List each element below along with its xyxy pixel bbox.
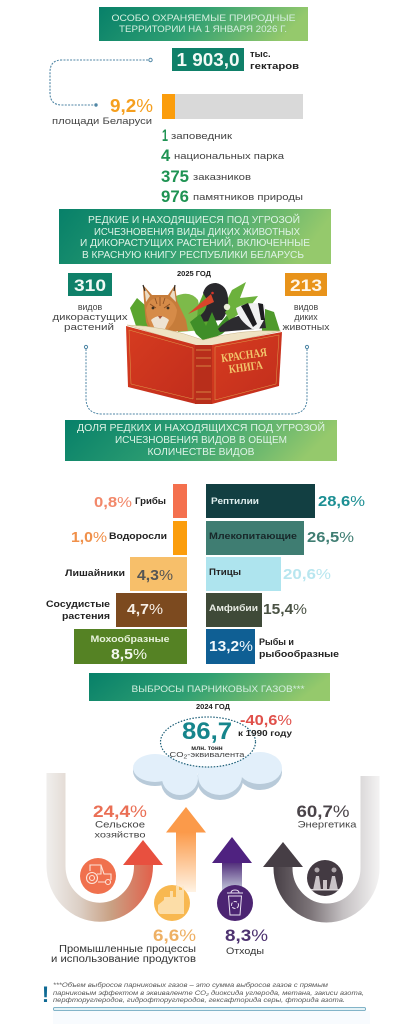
bar: birds: Птицы <box>209 567 241 577</box>
book left cover <box>126 326 196 404</box>
arrow: hectares to share of area <box>50 58 152 107</box>
label: industry: 6,6% <box>153 927 196 945</box>
bar: lichens: 4,3% <box>137 567 173 584</box>
bar: fish: рыбообразные <box>259 649 339 659</box>
bar chart: animals <box>206 484 365 664</box>
heading: Red Book: ИСЧЕЗНОВЕНИЯ ВИДЫ ДИКИХ ЖИВОТНЫХ <box>94 227 300 238</box>
list: protected area types <box>161 126 303 206</box>
label: waste: 8,3% <box>225 927 268 945</box>
footnote: парниковым эффектом в эквиваленте CO₂ диоксида углерода, метана, закиси азота, <box>53 989 364 997</box>
change against 1990: -40,6% <box>240 712 292 729</box>
stat: share of Belarus area: 9,2% <box>110 96 153 116</box>
emissions total: млн. тонн <box>191 745 223 752</box>
heading: greenhouse gases <box>89 673 330 701</box>
bar: mammals: Млекопитающие <box>209 531 297 541</box>
U arrow: energy <box>263 776 370 913</box>
book title: КНИГА <box>228 358 264 376</box>
icon: power plant <box>307 860 343 896</box>
bar: mammals: 26,5% <box>307 529 354 546</box>
year label: 2024: 2024 ГОД <box>196 702 231 711</box>
stat: share of Belarus area: площади Беларуси <box>52 116 152 126</box>
footnote: ***Объем выбросов парниковых газов – это сумма выбросов газов с прямым <box>53 981 328 989</box>
bar: reptiles: 28,6% <box>318 493 365 510</box>
heading: Red Book: В КРАСНУЮ КНИГУ РЕСПУБЛИКИ БЕЛАРУСЬ <box>82 250 304 261</box>
emissions total: 2 <box>183 754 187 760</box>
emissions total: -эквивалента <box>187 750 246 759</box>
heading: share of rare species <box>65 420 337 461</box>
label: waste: Отходы <box>226 946 264 957</box>
bar: amphibians: Амфибии <box>209 603 258 613</box>
heading: protected areas <box>99 7 308 41</box>
arrow: waste <box>212 837 252 892</box>
bar: algae: 1,0% <box>71 529 107 546</box>
heading: share of rare species: ДОЛЯ РЕДКИХ И НАХОДЯЩИХСЯ ПОД УГРОЗОЙ <box>77 421 325 434</box>
black stork <box>188 283 228 322</box>
stat: wild plants: видов <box>78 302 102 312</box>
stat: protected area in hectares <box>172 48 299 72</box>
stat: protected area in hectares: гектаров <box>250 61 299 72</box>
bar: vascular plants: 4,7% <box>127 601 163 618</box>
lynx <box>143 285 188 332</box>
bar: bryophytes: Мохообразные <box>90 634 170 644</box>
stat: protected area in hectares: тыс. <box>250 49 271 60</box>
bar: bryophytes: 8,5% <box>111 646 147 663</box>
stat: wild animals <box>282 273 330 332</box>
list: protected area types: заповедник <box>171 131 233 141</box>
bar: share of area <box>162 94 303 119</box>
ferns behind <box>130 282 280 332</box>
icon: exclamation mark: ! <box>42 982 49 1007</box>
bar: fish: Рыбы и <box>259 637 294 647</box>
year label: 2025: 2025 ГОД <box>177 269 212 278</box>
stat: wild animals: видов <box>294 302 318 312</box>
footnote <box>53 981 364 1004</box>
U arrow: agriculture <box>56 773 163 912</box>
bar: lichens <box>65 557 187 591</box>
bar: fungi: Грибы <box>135 496 166 506</box>
bar: vascular plants: Сосудистые <box>46 599 110 609</box>
stat: protected area in hectares: 1 903,0 <box>176 49 240 70</box>
label: energy: 60,7 % <box>296 803 350 821</box>
emissions total <box>160 717 256 767</box>
heading: share of rare species: КОЛИЧЕСТВЕ ВИДОВ <box>148 447 255 458</box>
emissions total: CO <box>170 750 181 759</box>
label: industry <box>51 927 196 965</box>
bar: reptiles: Рептилии <box>211 496 259 506</box>
book title: КРАСНАЯ <box>220 345 268 365</box>
change against 1990 <box>238 712 292 738</box>
label: industry: и использование продуктов <box>51 954 196 965</box>
heading: Red Book: И ДИКОРАСТУЩИХ РАСТЕНИЙ, ВКЛЮЧЕННЫЕ <box>80 236 310 249</box>
book title <box>220 345 270 377</box>
list: protected area types: заказников <box>193 172 251 182</box>
stat: wild plants: растений <box>64 322 114 332</box>
bar: amphibians <box>206 593 307 627</box>
bar: algae <box>71 521 187 555</box>
label: agriculture: Сельское <box>95 820 145 830</box>
label: industry: Промышленные процессы <box>59 944 196 955</box>
label: agriculture <box>93 803 147 840</box>
arrow: industry <box>166 807 206 892</box>
label: energy <box>296 803 357 830</box>
bar: mammals <box>206 521 354 555</box>
change against 1990: к 1990 году <box>238 728 292 738</box>
heading: Red Book: РЕДКИЕ И НАХОДЯЩИЕСЯ ПОД УГРОЗОЙ <box>88 213 300 226</box>
bar: birds: 20,6% <box>283 566 331 583</box>
icon: recycle bin <box>217 885 253 921</box>
badger <box>218 303 266 332</box>
bar: fungi: 0,8% <box>94 494 132 511</box>
book pages <box>127 325 281 346</box>
book spine <box>195 345 212 404</box>
footnote: перфторуглеродов, гидрофторуглеродов, гексафторида серы, фторида азота. <box>53 996 345 1004</box>
bar: reptiles <box>206 484 365 518</box>
list: protected area types: 1 <box>162 126 168 145</box>
label: agriculture: 24,4 % <box>93 803 147 821</box>
bar: amphibians: 15,4% <box>263 601 307 618</box>
list: protected area types: 4 <box>161 147 171 165</box>
heading: share of rare species: ИСЧЕЗНОВЕНИЯ ВИДОВ В ОБЩЕМ <box>115 435 287 446</box>
stat: wild plants <box>52 273 128 332</box>
stat: share of Belarus area <box>52 96 153 126</box>
stat: wild animals: диких <box>294 312 318 322</box>
bar: birds <box>206 557 331 591</box>
arrow: dashed connector <box>84 345 309 414</box>
bar chart: plants and fungi <box>46 484 187 664</box>
footnote rule <box>53 1008 370 1024</box>
stat: wild plants: дикорастущих <box>52 312 128 322</box>
bar: bryophytes <box>74 629 187 664</box>
heading: Red Book <box>59 209 331 264</box>
emissions total: 86,7 <box>182 718 232 745</box>
label: waste <box>225 927 268 957</box>
bar: lichens: Лишайники <box>65 568 125 578</box>
bar: algae: Водоросли <box>109 531 167 541</box>
list: protected area types: 976 <box>161 188 189 206</box>
label: energy: Энергетика <box>298 820 357 830</box>
list: protected area types: национальных парка <box>174 151 285 161</box>
bar: vascular plants <box>46 593 187 627</box>
illustration: Red Book with animals <box>126 282 282 404</box>
front ferns <box>190 302 238 342</box>
heading: protected areas: ТЕРРИТОРИИ НА 1 ЯНВАРЯ 2026 Г. <box>119 24 287 35</box>
bar: fish <box>206 629 339 664</box>
book right cover <box>212 332 282 404</box>
list: protected area types: 375 <box>161 168 189 186</box>
icon: factory <box>154 885 190 921</box>
stat: wild animals: 213 <box>290 276 322 295</box>
list: protected area types: памятников природы <box>193 192 303 202</box>
heading: protected areas: ОСОБО ОХРАНЯЕМЫЕ ПРИРОДНЫЕ <box>112 13 296 24</box>
cloud <box>133 752 282 800</box>
heading: greenhouse gases: ВЫБРОСЫ ПАРНИКОВЫХ ГАЗОВ*** <box>132 684 305 695</box>
stat: wild plants: 310 <box>74 276 106 295</box>
bar: vascular plants: растения <box>62 611 110 621</box>
icon: tractor <box>80 858 116 894</box>
stat: wild animals: животных <box>282 322 330 332</box>
bar: fish: 13,2% <box>209 639 253 655</box>
label: agriculture: хозяйство <box>94 830 146 840</box>
bar: fungi <box>94 484 187 518</box>
